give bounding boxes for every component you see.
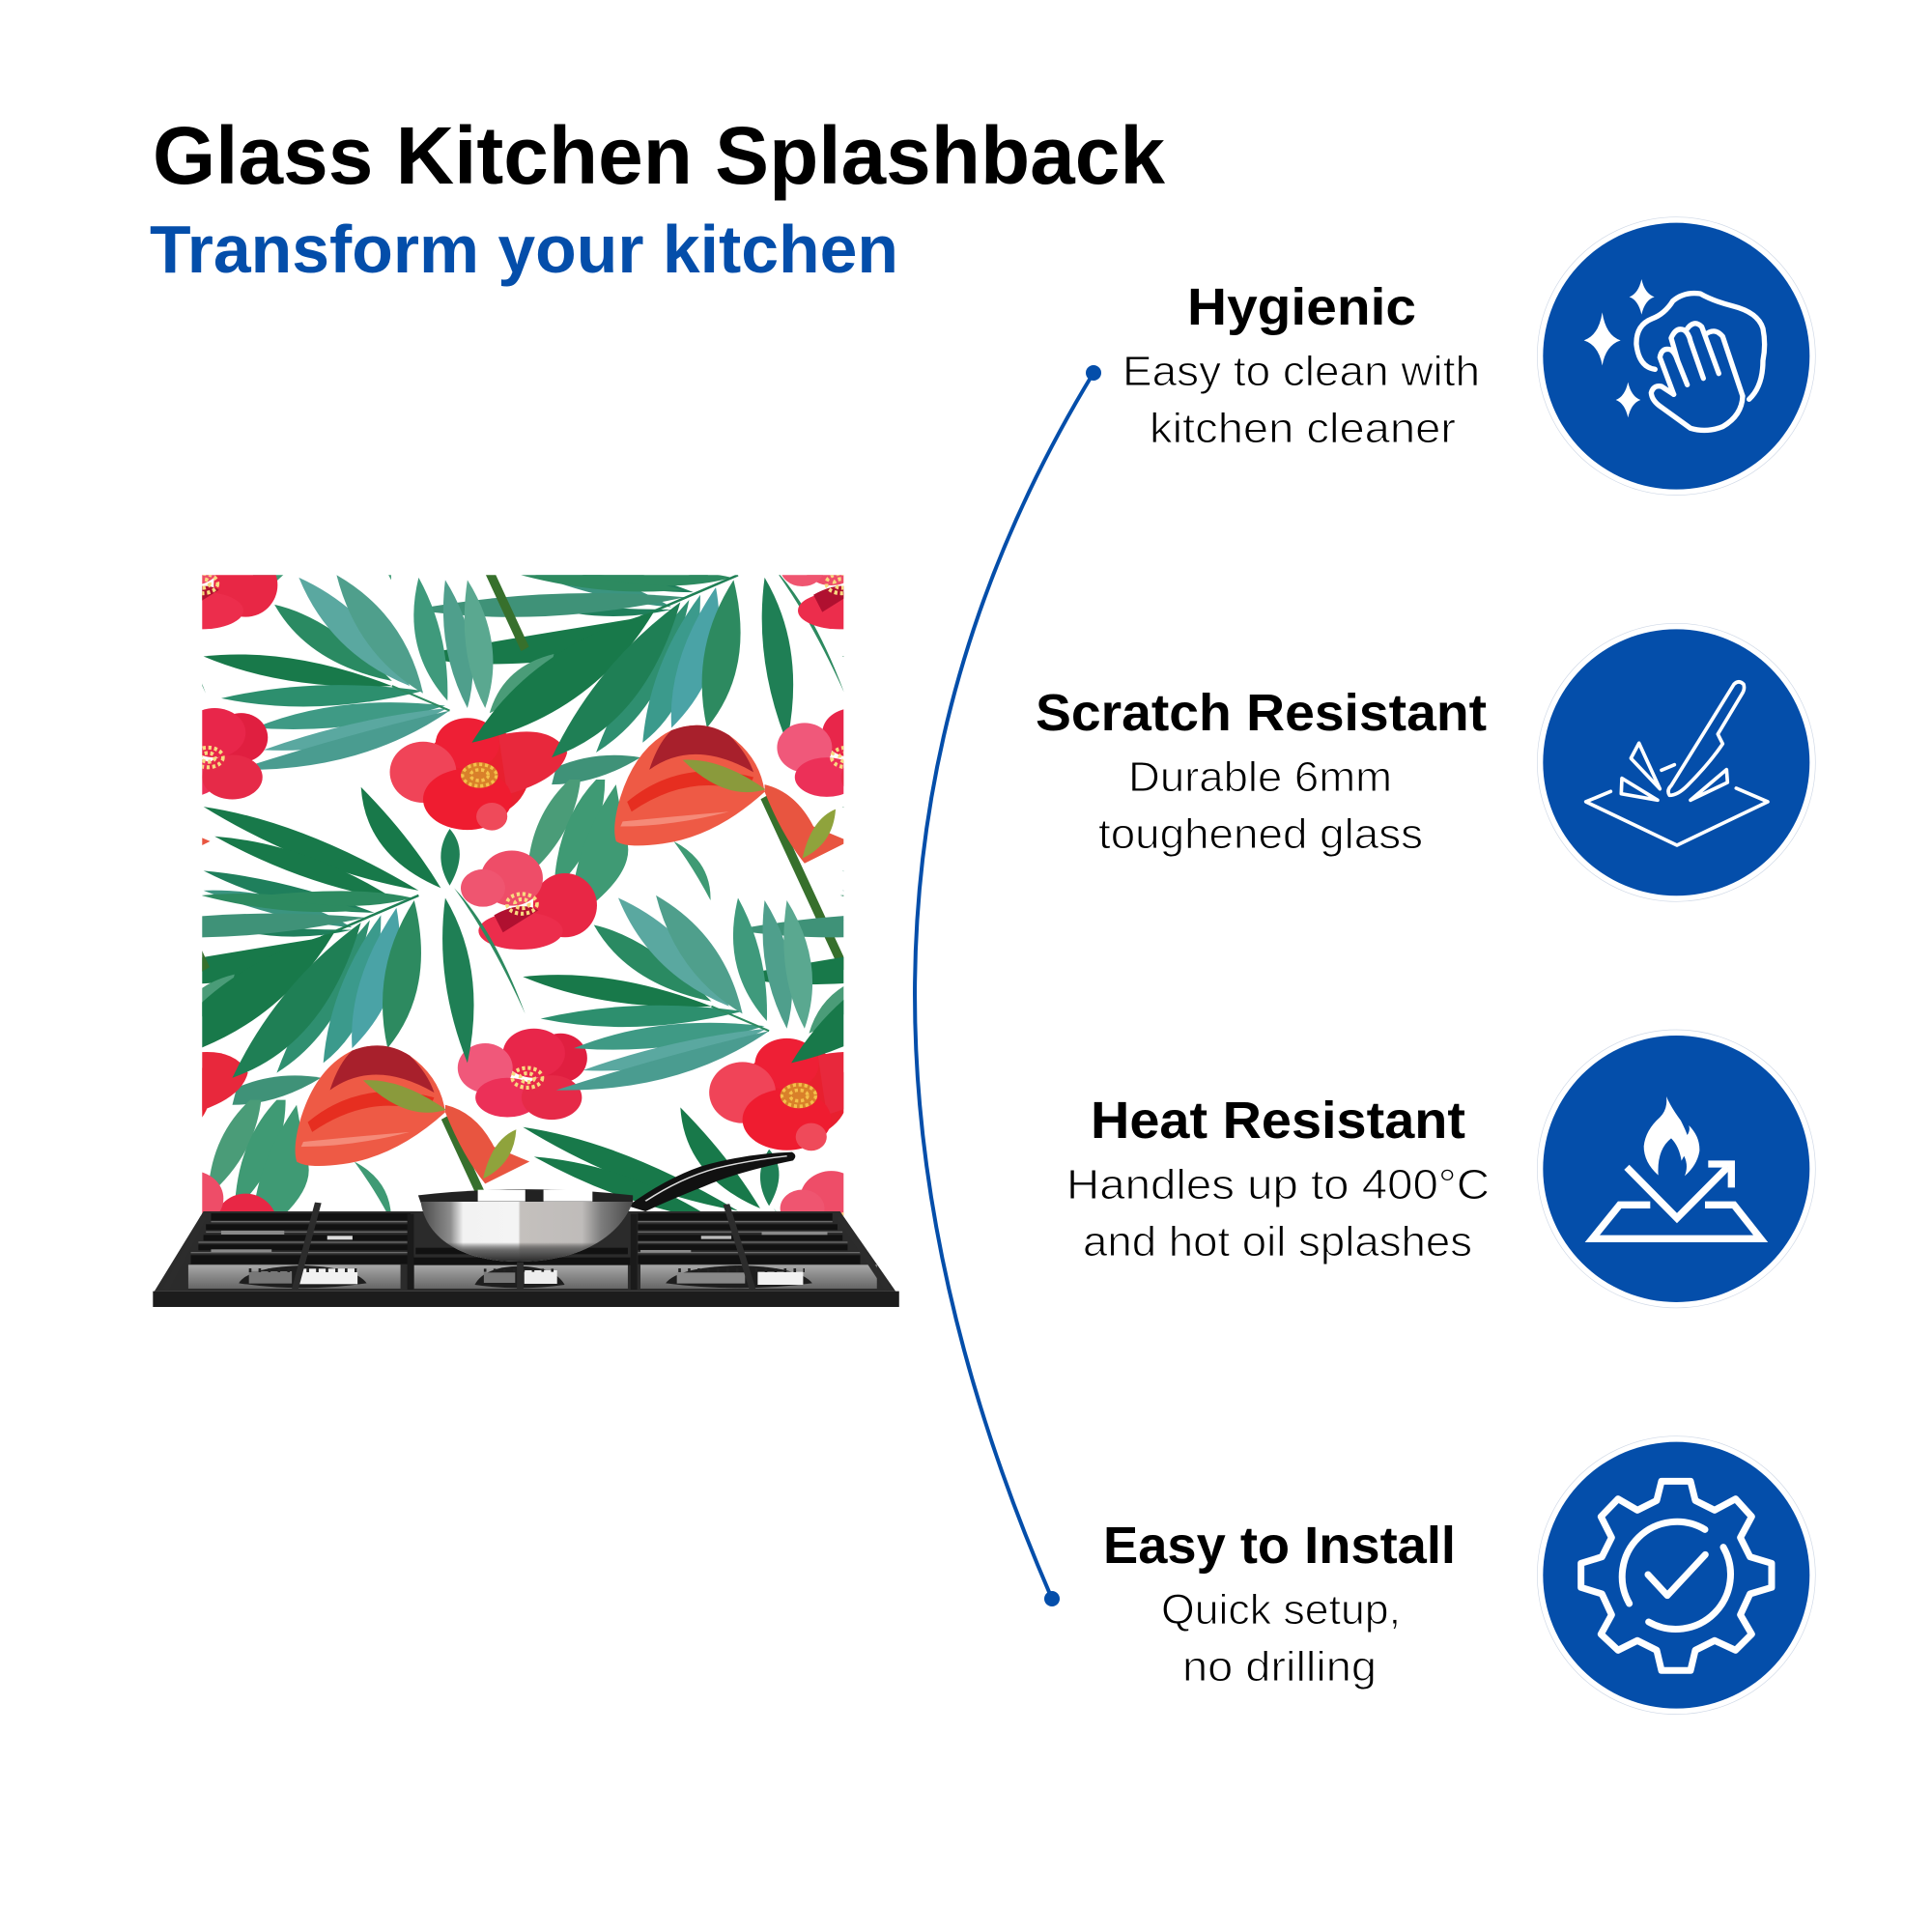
icon: gear with check mark: [1537, 1436, 1815, 1715]
feature: scratch resistant text: Durable 6mm: [1128, 753, 1392, 801]
feature: heat resistant text: Heat Resistant: [1091, 1092, 1465, 1150]
feature: scratch resistant text: [1036, 684, 1487, 858]
feature: heat resistant text: [1066, 1092, 1490, 1265]
feature: scratch resistant text: Scratch Resistant: [1036, 684, 1487, 742]
panel: tropical glass splashback pattern: [202, 575, 844, 1216]
feature: hygienic text: Easy to clean with: [1122, 348, 1480, 395]
feature: easy to install text: Quick setup,: [1161, 1586, 1401, 1634]
feature: hygienic text: kitchen cleaner: [1150, 405, 1456, 452]
feature: easy to install text: [1103, 1517, 1456, 1690]
feature: hygienic text: Hygienic: [1187, 278, 1416, 336]
feature: hygienic text: [1122, 278, 1480, 452]
feature: scratch resistant text: toughened glass: [1098, 810, 1423, 858]
icon: hand wiping with sparkles: [1537, 217, 1815, 496]
icon: knife scratching glass: [1537, 623, 1815, 901]
gas hob with burners: [153, 1203, 899, 1307]
infographic canvas: [151, 124, 1816, 1715]
icon: flame and heat deflecting from surface: [1537, 1030, 1815, 1308]
curved connector line with end dots: [915, 365, 1101, 1606]
feature: easy to install text: Easy to Install: [1103, 1517, 1456, 1575]
title: Glass Kitchen Splashback: [153, 110, 1165, 201]
frying pan: [418, 1152, 795, 1262]
feature: heat resistant text: and hot oil splashes: [1083, 1218, 1472, 1265]
feature: easy to install text: no drilling: [1182, 1643, 1377, 1690]
subtitle: Transform your kitchen: [150, 212, 898, 287]
feature: heat resistant text: Handles up to 400°C: [1066, 1161, 1490, 1208]
